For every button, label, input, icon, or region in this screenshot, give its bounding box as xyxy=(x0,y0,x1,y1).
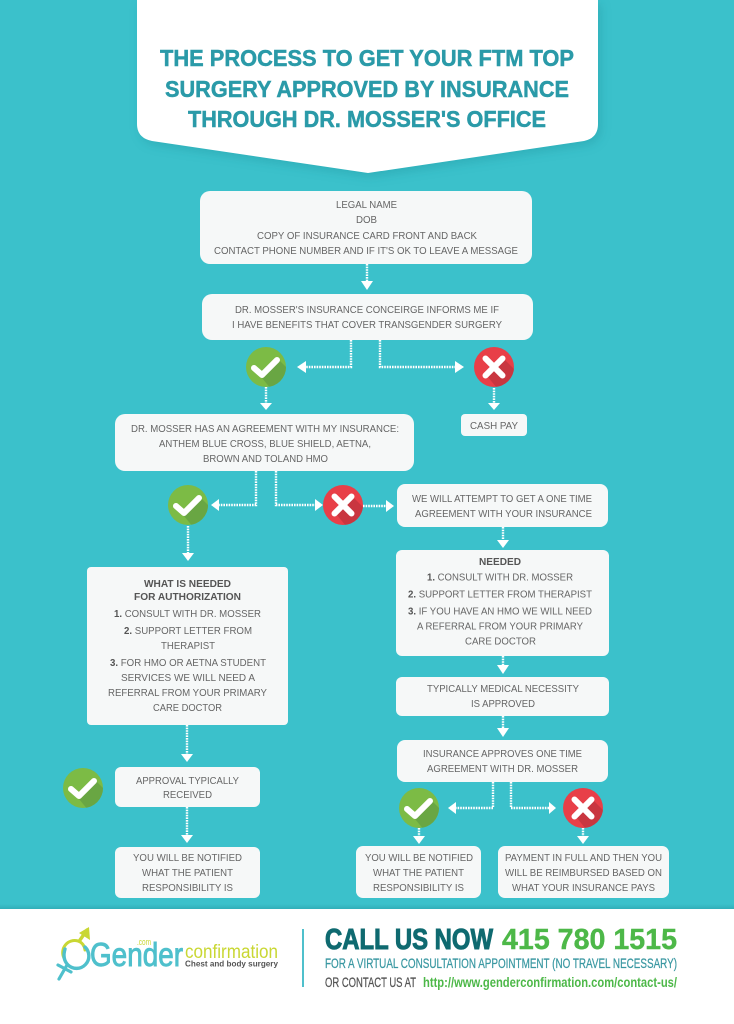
arrow: no to payment xyxy=(577,828,589,844)
box: notified left: RESPONSIBILITY IS xyxy=(142,883,233,894)
box: notified right: RESPONSIBILITY IS xyxy=(373,883,464,894)
call to action: OR CONTACT US AT xyxy=(325,974,416,990)
box: insurance concierge xyxy=(202,294,533,340)
logo xyxy=(58,927,278,979)
arrow: yes to notified xyxy=(413,828,425,844)
box: what is needed for authorization: SERVICES WE WILL NEED A xyxy=(121,673,255,684)
box: medical necessity xyxy=(396,677,609,716)
box: what is needed for authorization: 3. FOR HMO OR AETNA STUDENT xyxy=(110,658,266,669)
title xyxy=(160,45,574,132)
box: insurance concierge: I HAVE BENEFITS THAT COVER TRANSGENDER SURGERY xyxy=(232,320,502,331)
box: payment in full: WHAT YOUR INSURANCE PAYS xyxy=(512,883,655,894)
box: what is needed for authorization xyxy=(87,567,288,725)
box: insurance concierge: DR. MOSSER'S INSURANCE CONCEIRGE INFORMS ME IF xyxy=(235,305,499,316)
box: notified right xyxy=(356,846,481,898)
logo: Chest and body surgery xyxy=(185,958,278,968)
box: approval received xyxy=(115,767,260,807)
box: insurance approves xyxy=(397,740,608,782)
footer xyxy=(0,904,734,1024)
arrow: concierge to yes xyxy=(297,340,351,373)
icon: check mark benefits xyxy=(246,347,286,387)
arrow: insurance approves to yes xyxy=(448,782,493,814)
box: payment in full xyxy=(498,846,669,898)
box: approval received: APPROVAL TYPICALLY xyxy=(136,776,239,787)
box: notified right: YOU WILL BE NOTIFIED xyxy=(365,853,473,864)
box: payment in full: WILL BE REIMBURSED BASED ON xyxy=(505,868,662,879)
arrow: approval to notified xyxy=(181,807,193,843)
title: THE PROCESS TO GET YOUR FTM TOP xyxy=(160,45,574,71)
arrow: insurance approves to no xyxy=(511,782,556,814)
arrow: no to cash pay xyxy=(488,388,500,410)
arrow: yes to agreement xyxy=(260,387,272,410)
box: cash pay: CASH PAY xyxy=(470,421,518,432)
box: notified right: WHAT THE PATIENT xyxy=(373,868,464,879)
box: needed: 3. IF YOU HAVE AN HMO WE WILL NEED xyxy=(408,606,592,618)
icon: check mark agreement xyxy=(168,485,208,525)
box: needed: CARE DOCTOR xyxy=(465,636,536,648)
box: what is needed for authorization: 2. SUPPORT LETTER FROM xyxy=(124,626,252,637)
box: notified left xyxy=(115,847,260,898)
title: SURGERY APPROVED BY INSURANCE xyxy=(165,76,569,102)
title: THROUGH DR. MOSSER'S OFFICE xyxy=(188,106,546,132)
box: payment in full: PAYMENT IN FULL AND THEN YOU xyxy=(505,853,662,864)
arrow: concierge to no xyxy=(380,340,464,373)
box: required information xyxy=(200,191,532,264)
box: one time agreement attempt: WE WILL ATTEMPT TO GET A ONE TIME xyxy=(412,494,592,505)
arrow: required information to concierge xyxy=(361,264,373,290)
arrow: agreement to yes xyxy=(211,471,256,511)
box: agreement with insurance: DR. MOSSER HAS AN AGREEMENT WITH MY INSURANCE: xyxy=(131,424,399,435)
box: notified left: WHAT THE PATIENT xyxy=(142,868,233,879)
call to action: CALL US NOW xyxy=(325,924,494,956)
box: needed: NEEDED xyxy=(479,557,521,568)
arrow: agreement to no xyxy=(276,471,323,511)
arrow: medical necessity to approval xyxy=(497,716,509,737)
box: required information: DOB xyxy=(356,215,377,226)
box: needed: 1. CONSULT WITH DR. MOSSER xyxy=(427,572,573,584)
arrow: one time agreement to needed xyxy=(497,527,509,548)
arrow: needed to medical necessity xyxy=(497,656,509,674)
box: required information: CONTACT PHONE NUMBER AND IF IT'S OK TO LEAVE A MESSAGE xyxy=(214,246,518,257)
box: agreement with insurance xyxy=(115,414,414,471)
logo: confirmation xyxy=(185,942,278,963)
call to action: 415 780 1515 xyxy=(502,924,677,956)
icon: gender symbol xyxy=(58,927,90,979)
icon: check mark one time agreement xyxy=(399,788,439,828)
logo: .com xyxy=(137,937,151,947)
icon: cross one time agreement xyxy=(563,788,603,828)
arrow: authorization to approval xyxy=(181,725,193,762)
box: required information: COPY OF INSURANCE CARD FRONT AND BACK xyxy=(257,231,477,242)
icon: check mark approval xyxy=(63,768,103,808)
box: what is needed for authorization: CARE DOCTOR xyxy=(153,703,222,714)
box: required information: LEGAL NAME xyxy=(336,200,397,211)
box: what is needed for authorization: 1. CONSULT WITH DR. MOSSER xyxy=(114,609,261,620)
box: medical necessity: TYPICALLY MEDICAL NECESSITY xyxy=(427,684,579,695)
box: what is needed for authorization: REFERRAL FROM YOUR PRIMARY xyxy=(108,688,267,699)
arrow: no to one time agreement xyxy=(363,500,394,512)
box: what is needed for authorization: THERAPIST xyxy=(161,641,215,652)
box: medical necessity: IS APPROVED xyxy=(471,699,535,710)
box: agreement with insurance: ANTHEM BLUE CROSS, BLUE SHIELD, AETNA, xyxy=(159,439,371,450)
call to action: http://www.genderconfirmation.com/contact-us/ xyxy=(423,974,677,990)
box: one time agreement attempt xyxy=(397,484,608,527)
call to action xyxy=(325,924,677,990)
box: needed xyxy=(396,550,609,656)
box: what is needed for authorization: FOR AUTHORIZATION xyxy=(134,592,241,603)
box: insurance approves: INSURANCE APPROVES ONE TIME xyxy=(423,749,582,760)
icon: cross agreement xyxy=(323,485,363,525)
box: agreement with insurance: BROWN AND TOLAND HMO xyxy=(203,454,328,465)
arrow: yes to authorization xyxy=(182,526,194,561)
icon: cross benefits xyxy=(474,347,514,387)
box: what is needed for authorization: WHAT IS NEEDED xyxy=(144,579,231,590)
header banner xyxy=(137,0,601,177)
box: notified left: YOU WILL BE NOTIFIED xyxy=(133,853,242,864)
box: needed: A REFERRAL FROM YOUR PRIMARY xyxy=(417,622,583,632)
box: approval received: RECEIVED xyxy=(163,790,212,801)
logo: Gender xyxy=(90,936,183,973)
divider xyxy=(302,929,304,987)
box: one time agreement attempt: AGREEMENT WITH YOUR INSURANCE xyxy=(415,509,592,520)
box: cash pay xyxy=(461,414,527,436)
box: needed: 2. SUPPORT LETTER FROM THERAPIST xyxy=(408,590,592,600)
box: insurance approves: AGREEMENT WITH DR. MOSSER xyxy=(427,764,578,775)
